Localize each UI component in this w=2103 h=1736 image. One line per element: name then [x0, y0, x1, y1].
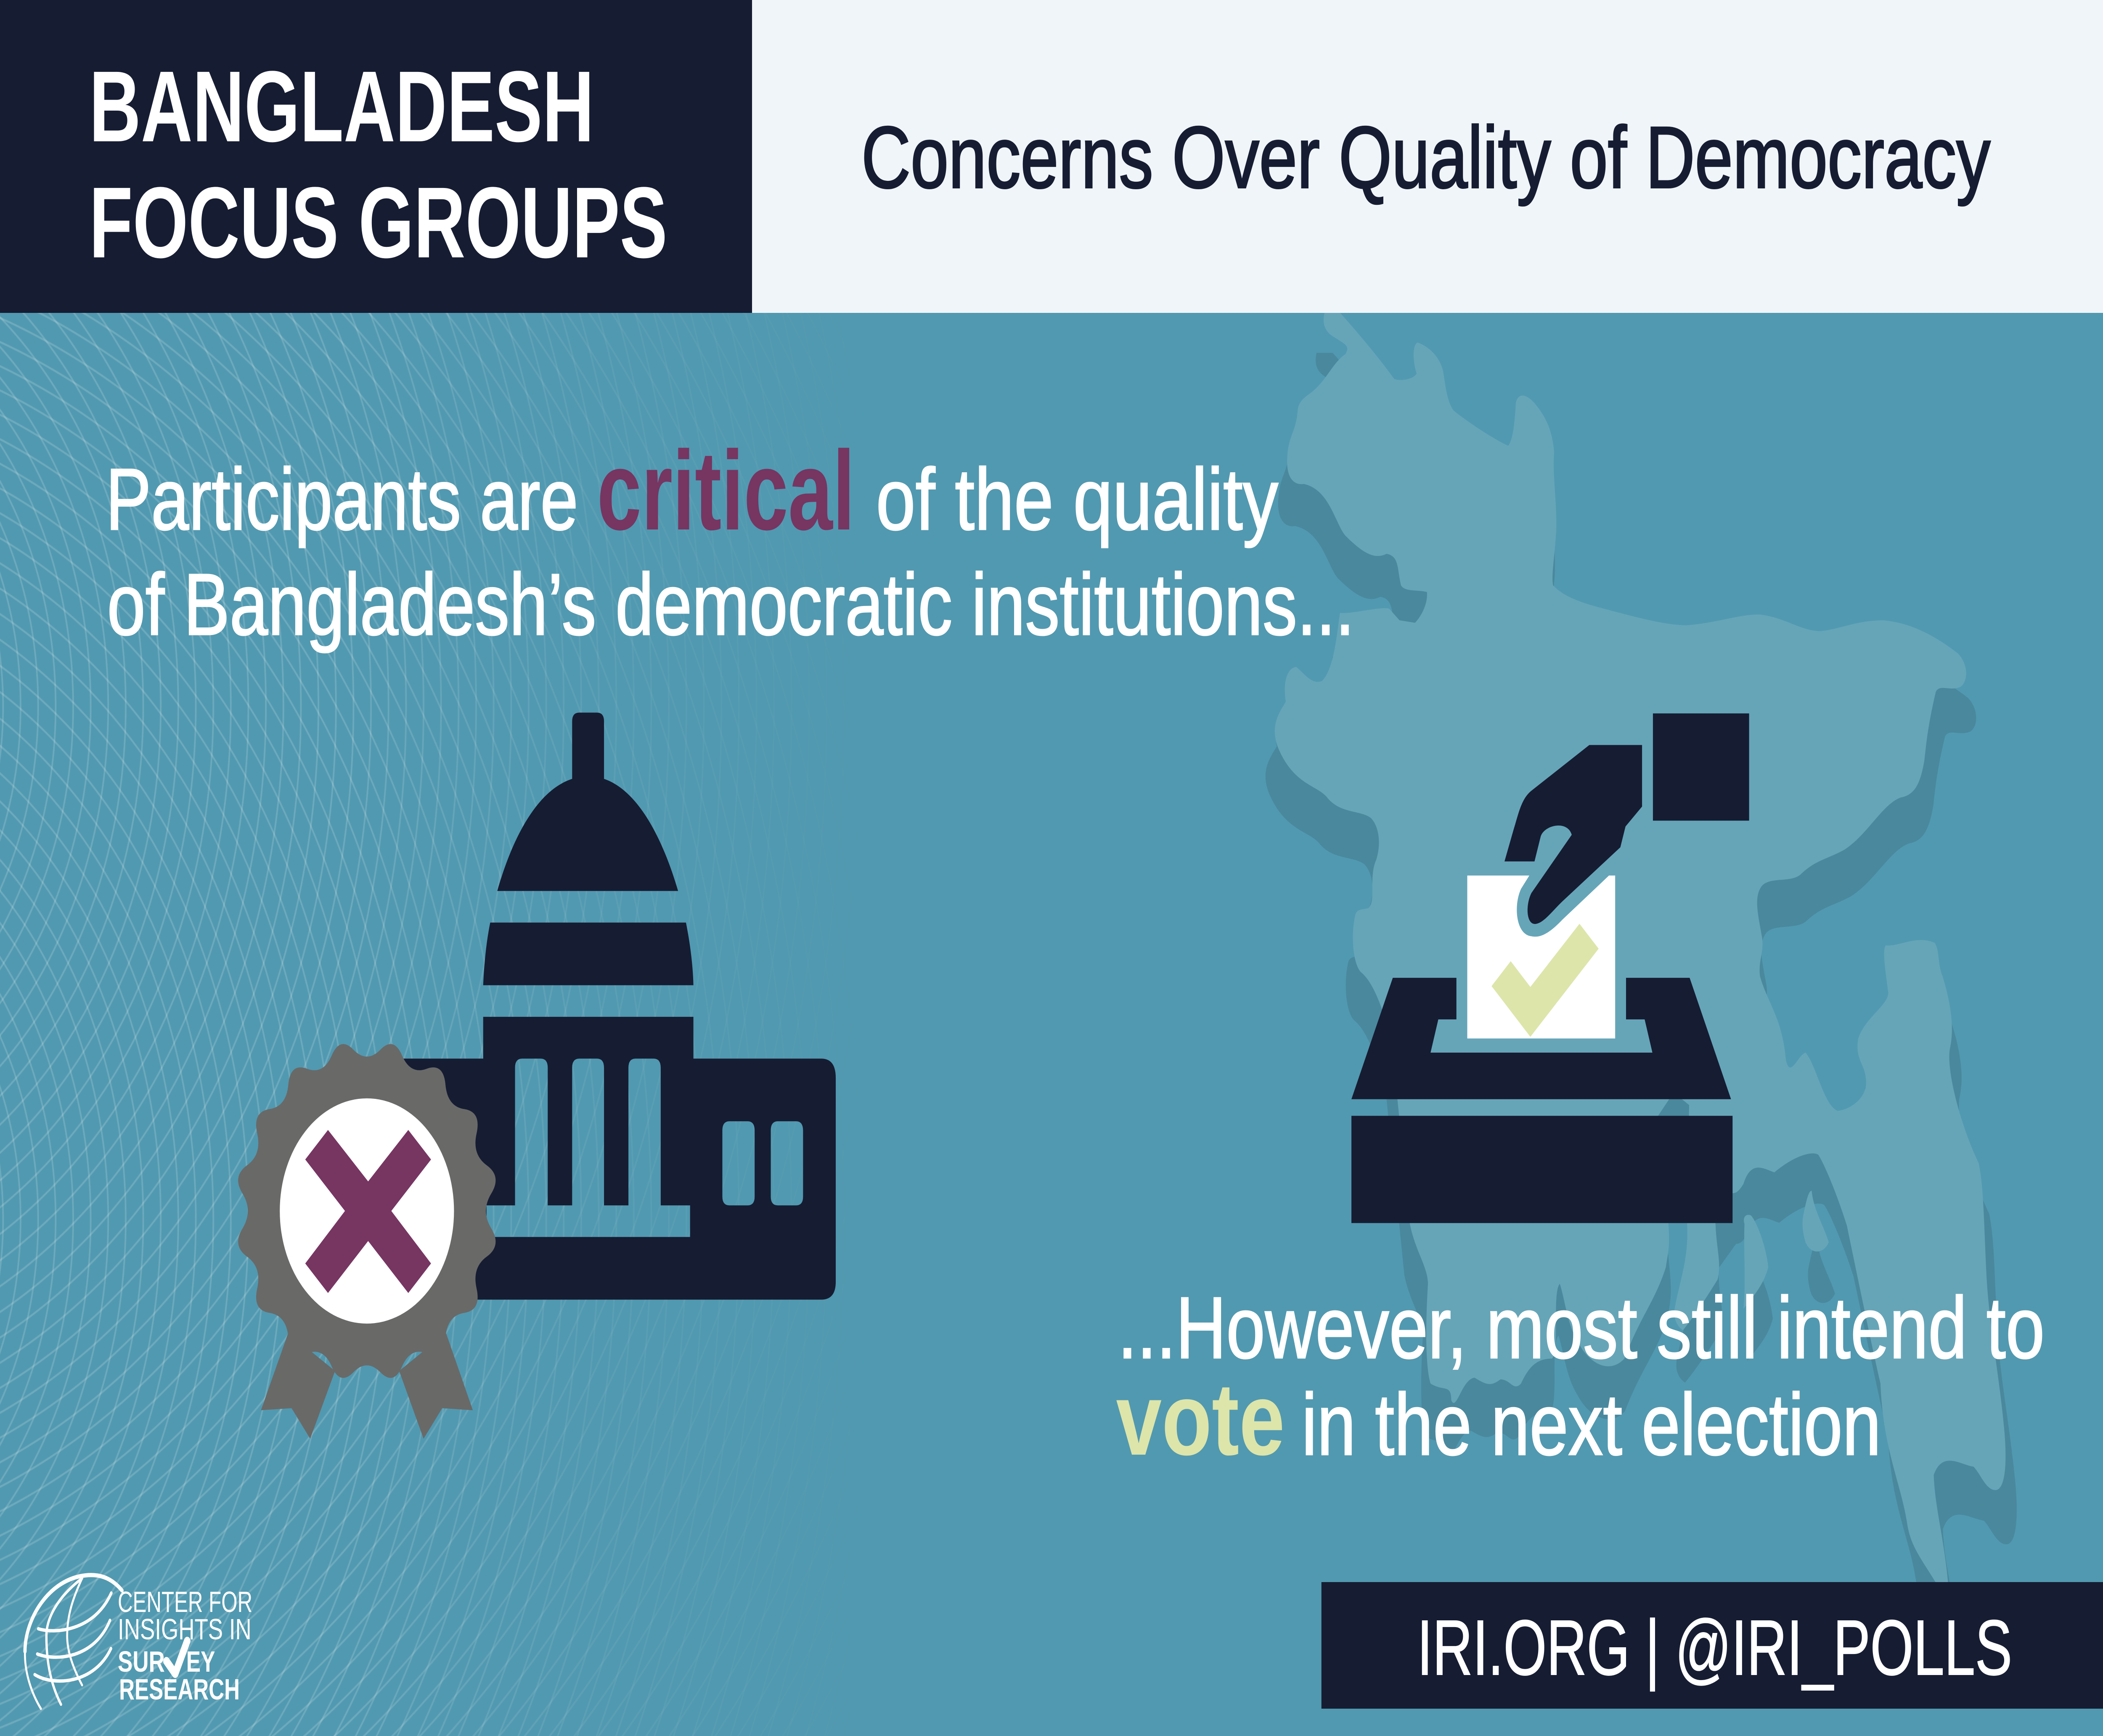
statement: critical of institutions: Participants are	[106, 451, 578, 548]
title: BANGLADESH	[89, 50, 594, 163]
footer links bar	[1322, 1582, 2103, 1709]
statement: still intend to vote: in the next election	[1302, 1376, 1881, 1474]
subtitle: Concerns Over Quality of Democracy	[861, 109, 1990, 206]
statement: critical of institutions: of Bangladesh’s democratic institutions...	[107, 556, 1354, 654]
map of Bangladesh with drop shadow	[1266, 312, 2017, 1647]
logo text: CENTER FOR	[118, 1585, 252, 1619]
statement: still intend to vote: ...However, most still intend to	[1118, 1279, 2045, 1377]
header	[0, 0, 2103, 313]
logo text: EY	[186, 1645, 215, 1678]
logo text: INSIGHTS IN	[118, 1613, 252, 1646]
check mark	[1491, 924, 1599, 1037]
header right panel	[752, 0, 2103, 313]
logo text: SUR	[118, 1645, 165, 1678]
statement: critical of institutions	[106, 427, 1354, 654]
hand	[1504, 745, 1642, 924]
ballot box	[1351, 978, 1732, 1223]
statement: still intend to vote	[1116, 1279, 2045, 1477]
ballot paper	[1467, 876, 1615, 1038]
sleeve	[1653, 713, 1749, 820]
globe mark	[25, 1575, 122, 1709]
icon: capitol building with rejected badge	[238, 713, 836, 1439]
footer links bar: IRI.ORG | @IRI_POLLS	[1417, 1604, 2012, 1691]
icon: hand casting ballot into box	[1351, 713, 1749, 1223]
statement: critical of institutions: critical	[597, 427, 855, 553]
statement: still intend to vote: vote	[1116, 1362, 1285, 1477]
title	[89, 50, 667, 279]
logo: Center for Insights in Survey Research	[25, 1575, 252, 1709]
statement: critical of institutions: of the quality	[876, 451, 1278, 548]
rejected badge	[238, 1044, 495, 1439]
logo text: RESEARCH	[119, 1673, 240, 1706]
capitol building	[401, 713, 836, 1299]
title: FOCUS GROUPS	[89, 167, 667, 279]
logo text	[118, 1585, 252, 1706]
header left panel	[0, 0, 752, 313]
